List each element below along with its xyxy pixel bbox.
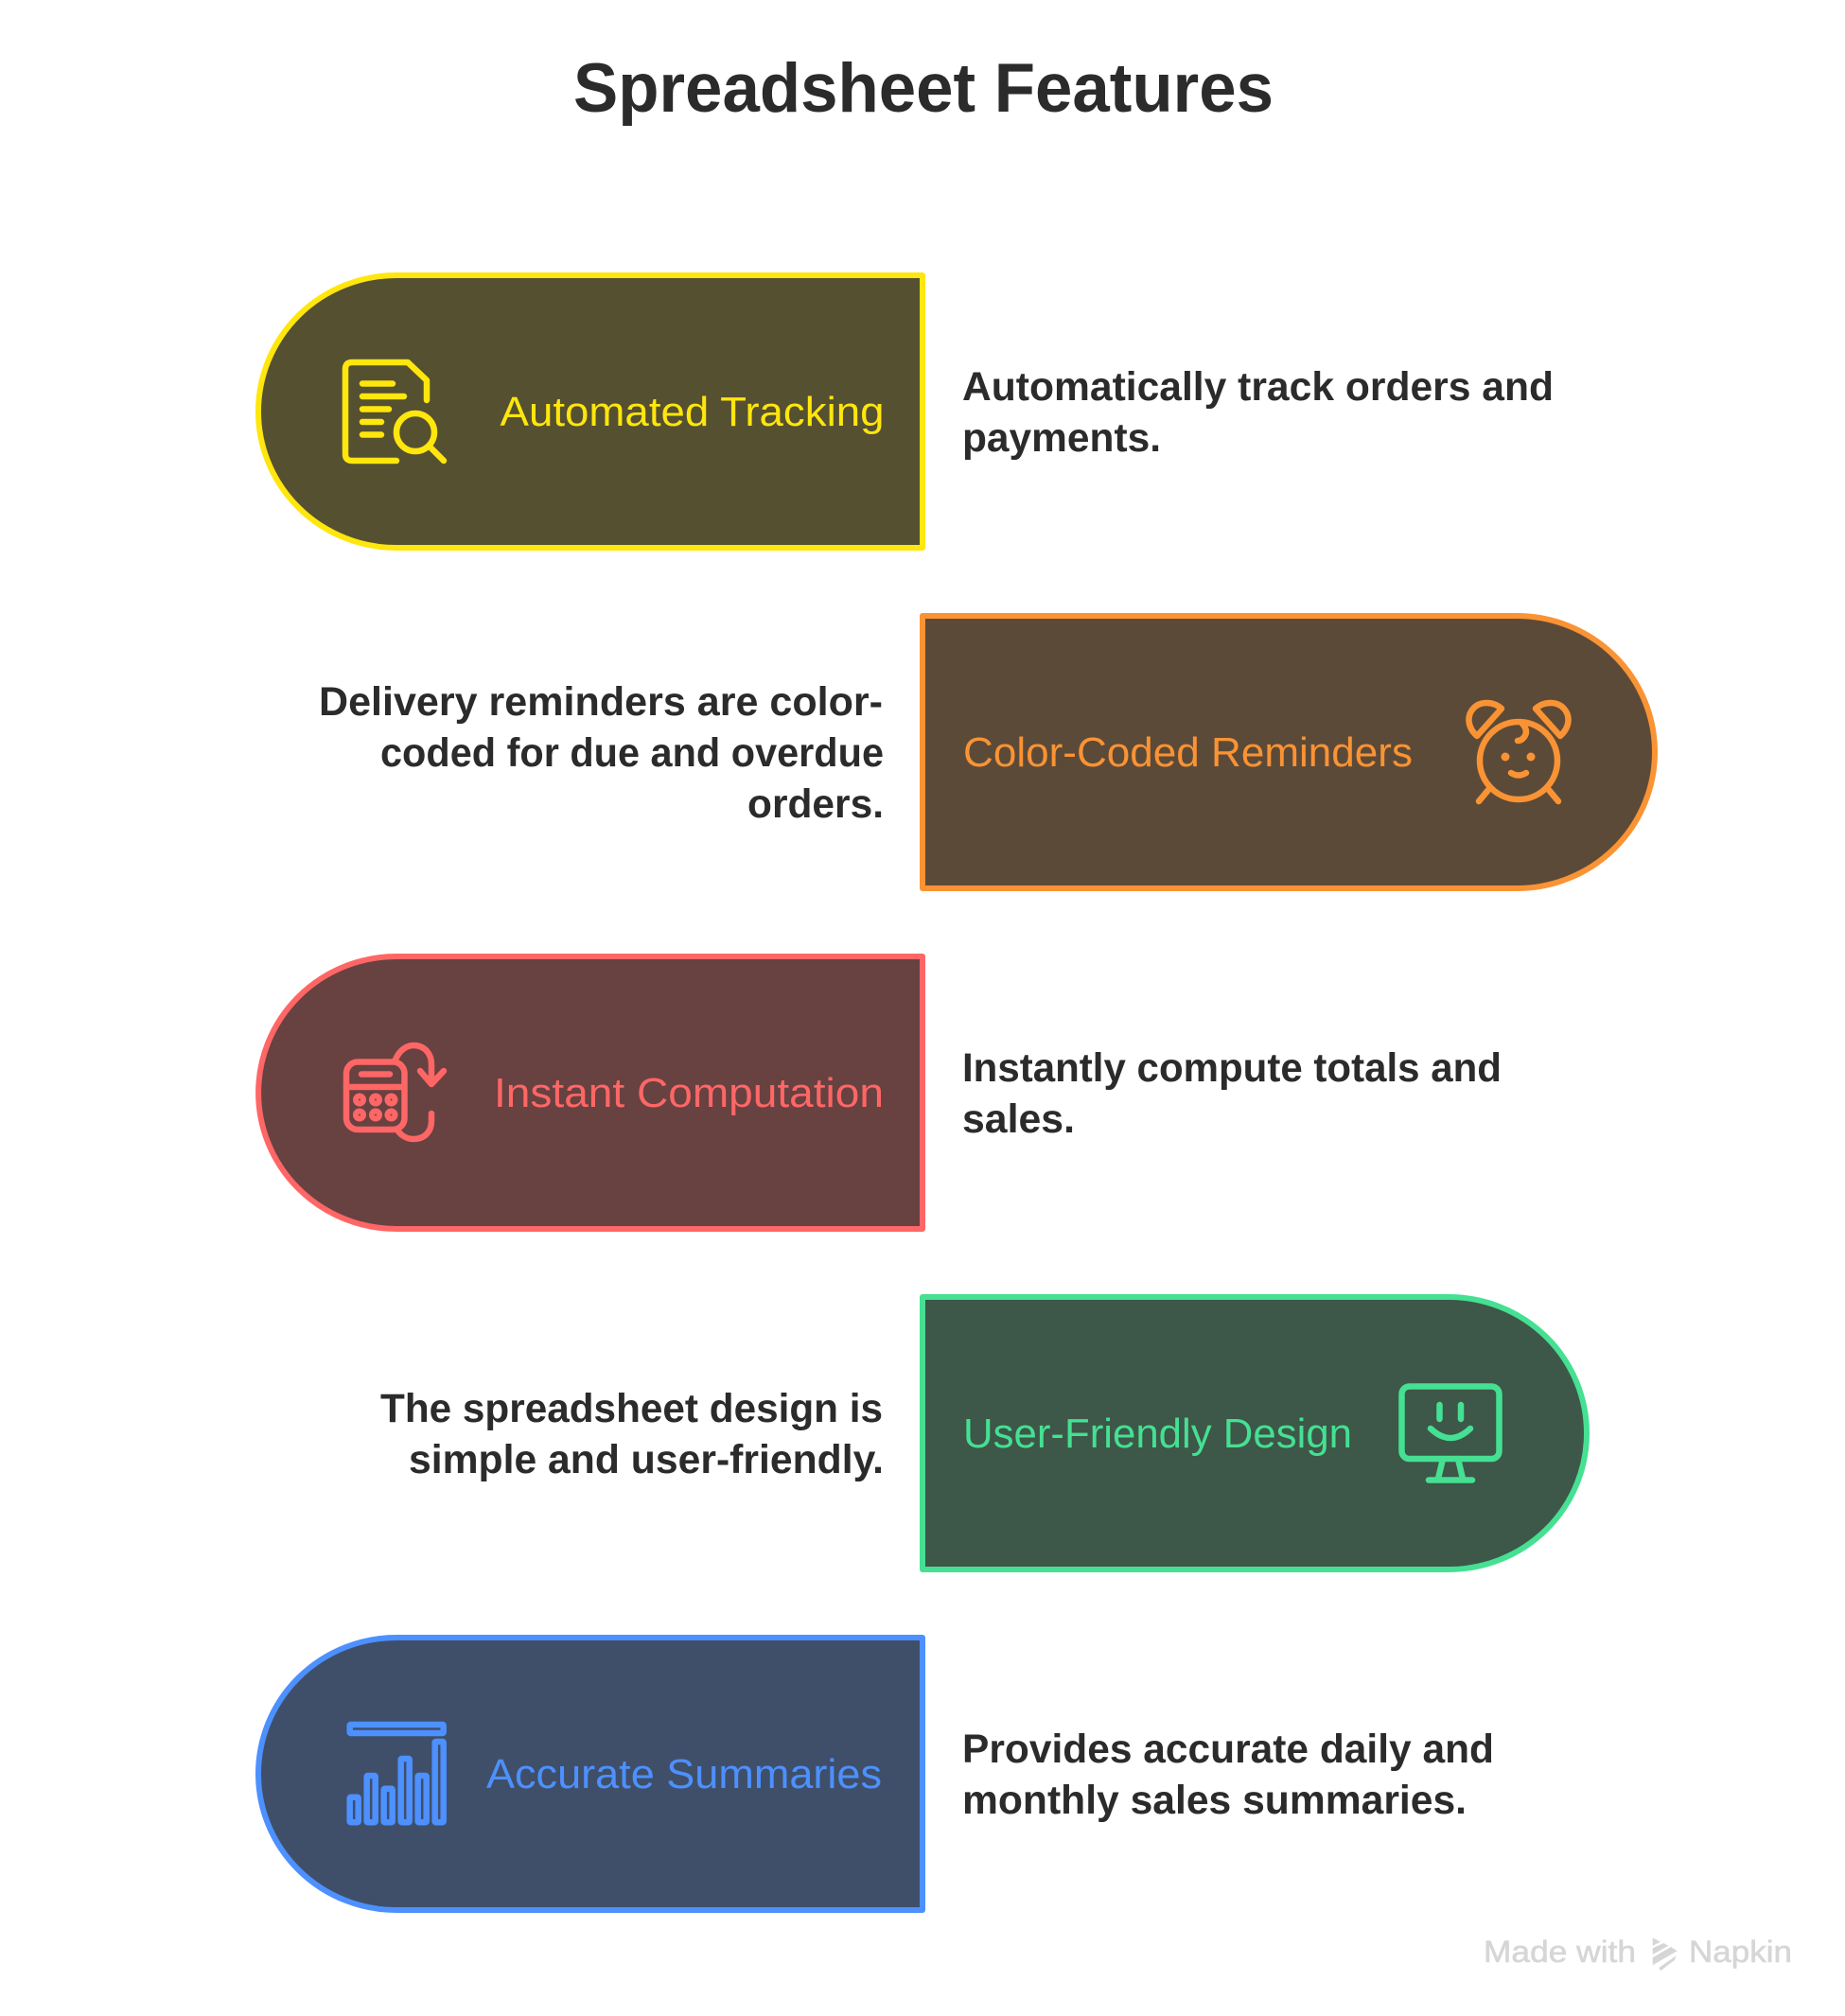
description: automated tracking: Automatically track orders and [962, 364, 1554, 410]
description: accurate summaries: Provides accurate daily and [962, 1727, 1494, 1772]
description: instant computation [962, 1045, 1502, 1142]
description: color-coded reminders: coded for due and overdue [380, 730, 884, 776]
panel shape: automated tracking [258, 275, 922, 548]
label: user-friendly design: User-Friendly Design [963, 1411, 1352, 1457]
footer: made with napkin: Napkin [1689, 1935, 1792, 1969]
description: instant computation: sales. [962, 1096, 1075, 1142]
description: color-coded reminders: Delivery reminders are color- [319, 679, 883, 725]
footer: made with napkin [1484, 1935, 1792, 1971]
panel shape: accurate summaries [258, 1638, 922, 1910]
panel: accurate summaries [258, 1638, 922, 1910]
label: color-coded reminders: Color-Coded Reminders [963, 729, 1413, 776]
icon: document with magnifier [345, 362, 444, 461]
description: user-friendly design: simple and user-friendly. [409, 1437, 884, 1482]
description: automated tracking: payments. [962, 415, 1161, 461]
panel: instant computation [258, 956, 922, 1229]
label: accurate summaries: Accurate Summaries [486, 1751, 882, 1797]
panel shape: instant computation [258, 956, 922, 1229]
label: automated tracking: Automated Tracking [500, 389, 884, 435]
description: instant computation: Instantly compute totals and [962, 1045, 1502, 1091]
icon: alarm clock with face [1468, 703, 1569, 801]
icon: bar chart [350, 1725, 444, 1822]
icon: napkin logo [1653, 1937, 1678, 1971]
description: accurate summaries: monthly sales summaries. [962, 1778, 1467, 1823]
icon: calculator with arrows [346, 1045, 444, 1139]
panel: automated tracking [258, 275, 922, 548]
panel shape: user-friendly design [922, 1297, 1587, 1569]
description: user-friendly design [380, 1386, 884, 1482]
panel: user-friendly design [922, 1297, 1587, 1569]
footer: made with napkin: Made with [1484, 1935, 1636, 1969]
description: accurate summaries [962, 1727, 1494, 1823]
description: color-coded reminders: orders. [747, 781, 884, 827]
description: automated tracking [962, 364, 1554, 461]
panel shape: color-coded reminders [922, 616, 1655, 888]
title: Spreadsheet Features [573, 50, 1274, 127]
label: instant computation: Instant Computation [494, 1070, 884, 1116]
icon: smiling monitor [1402, 1387, 1499, 1480]
description: user-friendly design: The spreadsheet design is [380, 1386, 883, 1431]
description: color-coded reminders [319, 679, 884, 827]
panel: color-coded reminders [922, 616, 1655, 888]
